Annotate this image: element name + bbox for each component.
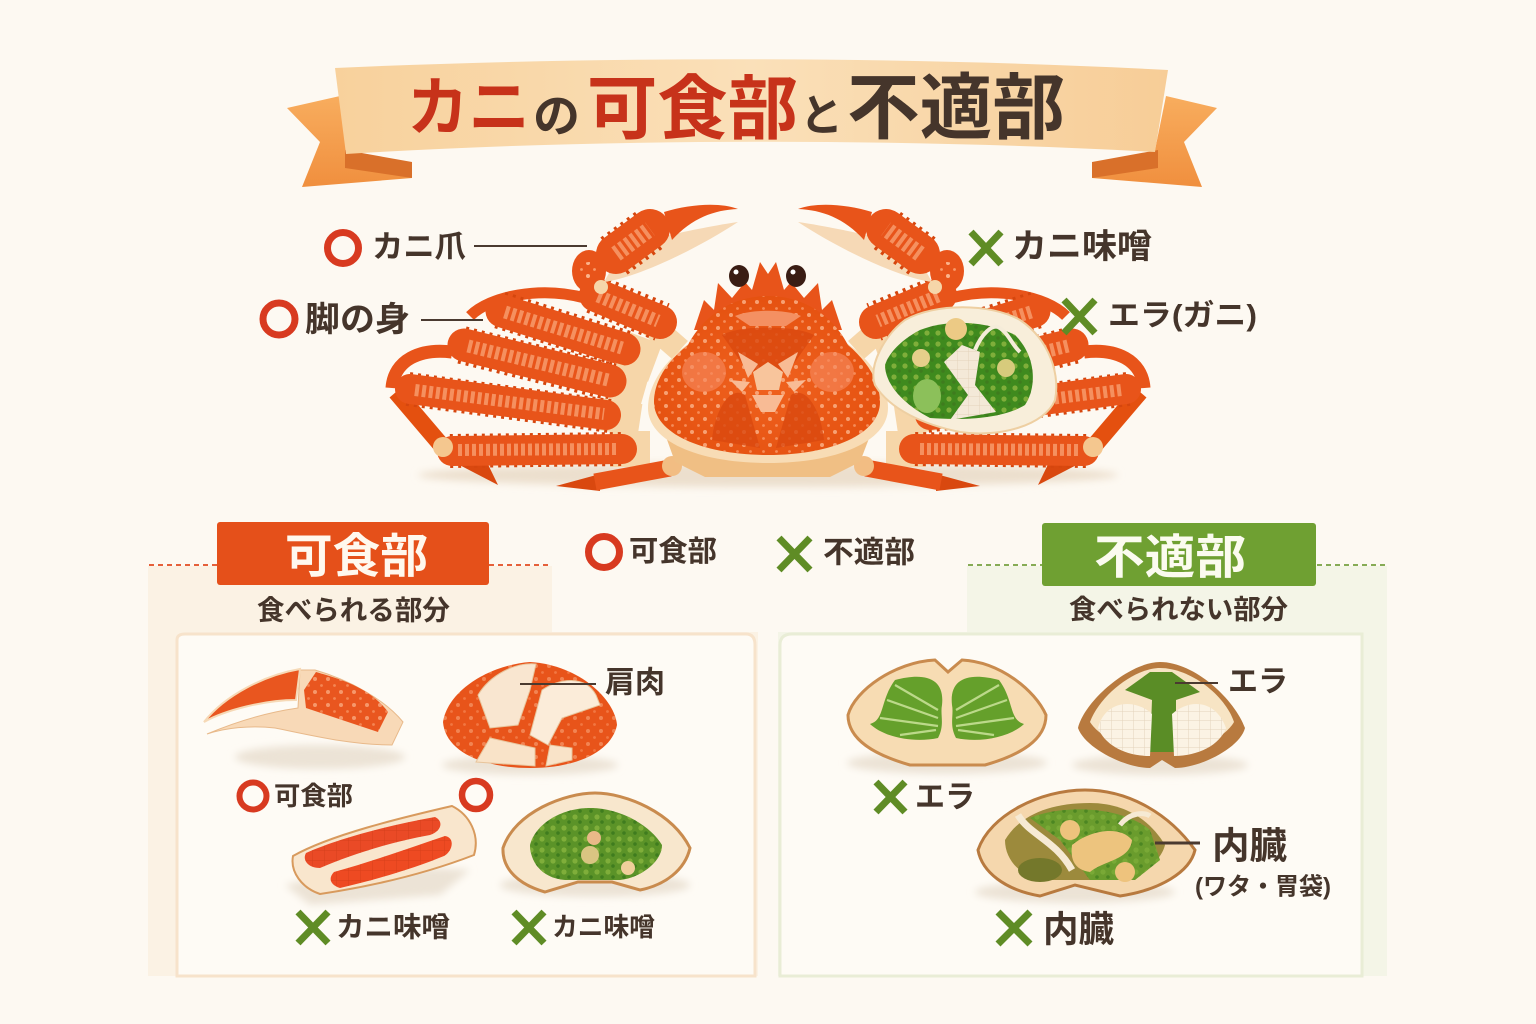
header xyxy=(1042,523,1316,586)
title: と xyxy=(800,92,843,140)
label: 可食部: 可食部 xyxy=(274,781,353,811)
line and label: 内臓: 内臓 xyxy=(1212,826,1287,866)
panel: 可食部 xyxy=(148,522,758,976)
legend: 不適部 xyxy=(823,536,915,570)
inner card xyxy=(177,634,755,976)
item: leg meat xyxy=(285,806,476,905)
label: カニ味噌 2: カニ味噌 xyxy=(552,912,655,942)
item: claw xyxy=(204,669,405,769)
item: viscera shell xyxy=(975,790,1195,903)
crab illustration xyxy=(392,205,1144,491)
header: 可食部 xyxy=(285,530,428,582)
callout: 脚の身: 脚の身 xyxy=(305,301,410,339)
label: エラ xyxy=(876,780,975,814)
panel: 不適部 xyxy=(778,523,1387,976)
callout: 脚の身 xyxy=(263,301,483,339)
title: 不適部 xyxy=(847,69,1065,149)
callout: カニ爪 xyxy=(328,230,587,264)
label: エラ: エラ xyxy=(915,780,975,814)
callout: エラ(ガニ): エラ(ガニ) xyxy=(1108,300,1257,332)
line and label: エラ xyxy=(1175,666,1288,698)
banner fold shadows xyxy=(345,150,1158,178)
crab left limbs xyxy=(392,205,738,491)
line and label: 肩肉: 肩肉 xyxy=(605,666,665,700)
crab shell xyxy=(654,262,880,455)
label: 内臓: 内臓 xyxy=(1043,908,1114,950)
callout: カニ味噌: カニ味噌 xyxy=(1012,228,1152,266)
open shell with innards xyxy=(873,307,1056,433)
label: 可食部 xyxy=(240,781,353,811)
crab right limbs mirrored xyxy=(798,205,1144,491)
line and label: 内臓: (ワタ・胃袋) xyxy=(1195,874,1331,900)
title banner xyxy=(287,59,1217,187)
title xyxy=(407,69,1065,149)
banner tail left xyxy=(287,96,412,187)
title: 可食部 xyxy=(587,70,798,148)
title: カニ xyxy=(407,72,530,144)
line and label: エラ: エラ xyxy=(1228,666,1288,698)
mark: circle xyxy=(462,781,490,809)
callout: カニ爪: カニ爪 xyxy=(372,230,466,264)
item: gills underside xyxy=(1072,662,1248,775)
header: 不適部 xyxy=(1094,530,1246,584)
panel background xyxy=(148,566,758,976)
panel background xyxy=(778,566,1387,976)
crab underbody xyxy=(660,420,876,477)
item: shoulder meat xyxy=(442,662,618,775)
item: gills shell xyxy=(847,660,1047,774)
crab eyes xyxy=(729,265,806,287)
label: カニ味噌 1: カニ味噌 xyxy=(336,912,450,942)
line and label: 内臓 xyxy=(1155,826,1331,900)
label: 内臓 xyxy=(998,908,1114,950)
subheading: 食べられる部分 xyxy=(257,594,451,626)
crab rim xyxy=(648,318,888,463)
header xyxy=(217,522,489,585)
crab shadow xyxy=(418,463,1118,487)
title: の xyxy=(533,90,580,142)
banner tail right xyxy=(1092,96,1217,187)
subheading: 食べられない部分 xyxy=(1069,595,1288,625)
item: kani miso shell xyxy=(500,793,690,897)
banner ribbon xyxy=(335,59,1168,154)
inner card xyxy=(780,634,1362,976)
legend: 可食部 xyxy=(629,535,717,568)
legend xyxy=(588,535,915,570)
